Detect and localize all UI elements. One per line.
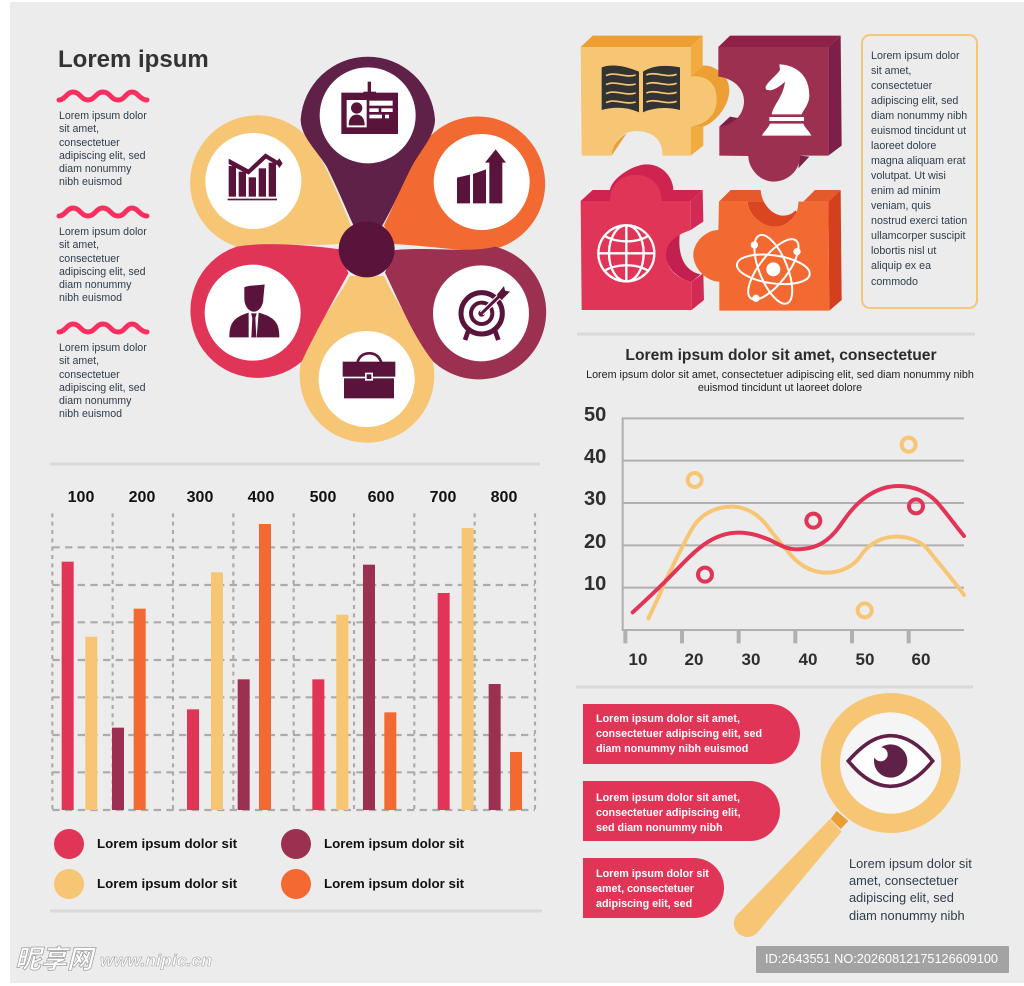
chart grid and axes (623, 417, 964, 643)
puzzle piece: yellow book (581, 36, 729, 156)
dashed grid (52, 513, 535, 810)
text panel: right of puzzle: sit amet, (871, 65, 911, 77)
magnifier caption: adipiscing elit, sed (849, 890, 954, 905)
legend: Lorem ipsum dolor sit (97, 836, 238, 851)
petal: left red (190, 244, 348, 378)
callout pills: Lorem ipsum dolor sit amet, (596, 713, 740, 725)
x axis labels: 10 (629, 650, 647, 669)
magnifier caption: Lorem ipsum dolor sit (849, 856, 972, 871)
text block 3: adipiscing elit, sed (59, 382, 146, 394)
text block 1: adipiscing elit, sed (59, 150, 146, 162)
id stamp: ID:2643551 NO:20260812175126609100 (765, 951, 998, 966)
text panel: right of puzzle: adipiscing elit, sed (871, 95, 958, 107)
callout pills: adipiscing elit, sed (596, 898, 692, 910)
puzzle graphic (581, 36, 842, 311)
column labels: 500 (310, 489, 336, 506)
x axis labels: 20 (685, 650, 703, 669)
callout pills (583, 704, 800, 918)
column labels (68, 489, 517, 506)
text panel: right of puzzle: magna aliquam erat (871, 155, 965, 167)
center circle (339, 221, 395, 277)
text block 1: nibh euismod (59, 176, 122, 188)
flower diagram (190, 57, 546, 443)
text block 3: nibh euismod (59, 408, 122, 420)
petal: bottom yellow (300, 276, 434, 443)
icon: globe (598, 225, 654, 281)
callout pills: amet, consectetuer (596, 883, 695, 895)
icon: target with arrow (461, 286, 510, 340)
magnifying glass with eye (734, 703, 951, 937)
title: Lorem ipsum (58, 46, 209, 73)
text panel: right of puzzle: consectetuer (871, 80, 933, 92)
y axis labels: 10 (584, 573, 606, 595)
callout pills: consectetuer adipiscing elit, (596, 807, 741, 819)
text block 2: sit amet, (59, 239, 99, 251)
id stamp (756, 946, 1009, 973)
x axis labels (629, 650, 930, 669)
icon: id badge (341, 82, 398, 134)
text panel: right of puzzle: nostrud exerci tation (871, 215, 967, 227)
text block 3: diam nonummy (59, 395, 132, 407)
puzzle piece: red globe (581, 164, 704, 310)
callout pills: Lorem ipsum dolor sit amet, (596, 792, 740, 804)
text panel: right of puzzle (862, 35, 977, 308)
text block 1: consectetuer (59, 137, 120, 149)
text panel: right of puzzle: volutpat. Ut wisi (871, 170, 946, 182)
wavy divider 2 (59, 208, 147, 216)
x axis labels: 30 (742, 650, 760, 669)
column labels: 600 (368, 489, 394, 506)
y axis labels: 50 (584, 404, 606, 426)
icon: chess knight (762, 64, 811, 136)
text block 2: adipiscing elit, sed (59, 266, 146, 278)
bars (62, 524, 522, 810)
text block 3: consectetuer (59, 369, 120, 381)
magnifier caption: amet, consectetuer (849, 873, 959, 888)
data lines and points (633, 438, 964, 618)
text block 2: consectetuer (59, 253, 120, 265)
text block 1: diam nonummy (59, 163, 132, 175)
text block 1: sit amet, (59, 123, 99, 135)
icon: open book (602, 66, 680, 112)
x axis labels: 40 (799, 650, 817, 669)
y axis labels: 30 (584, 488, 606, 510)
bar chart (52, 489, 535, 810)
petal: right orange (384, 116, 545, 251)
wavy divider 3 (59, 324, 147, 332)
line chart (584, 404, 964, 669)
callout pills: diam nonummy nibh euismod (596, 743, 748, 755)
x axis labels: 60 (912, 650, 930, 669)
line chart heading: Lorem ipsum dolor sit amet, consectetuer (625, 347, 937, 364)
y axis labels: 20 (584, 531, 606, 553)
text panel: right of puzzle: veniam, quis (871, 200, 931, 212)
legend: Lorem ipsum dolor sit (324, 836, 465, 851)
icon: eye (848, 736, 933, 786)
wavy divider 1 (59, 92, 147, 100)
petal: left yellow (190, 115, 351, 247)
icon: atom (735, 230, 812, 309)
text block 2: nibh euismod (59, 292, 122, 304)
puzzle piece: maroon knight (718, 36, 842, 182)
text panel: right of puzzle: aliquip ex ea (871, 260, 931, 272)
line chart description: euismod tincidunt ut laoreet dolore (698, 382, 862, 394)
callout pills: Lorem ipsum dolor sit (596, 868, 709, 880)
column labels: 800 (491, 489, 517, 506)
callout pills: sed diam nonummy nibh (596, 822, 723, 834)
petal: top purple (301, 57, 435, 227)
column labels: 200 (129, 489, 155, 506)
text panel: right of puzzle: commodo (871, 276, 918, 288)
text block 2: Lorem ipsum dolor (59, 226, 147, 238)
watermark logo: 昵享网 (15, 939, 97, 976)
legend (54, 829, 465, 899)
text panel: right of puzzle: laoreet dolore (871, 140, 936, 152)
puzzle piece: orange atom (693, 190, 842, 311)
text panel: right of puzzle: euismod tincidunt ut (871, 125, 966, 137)
text panel: right of puzzle: Lorem ipsum dolor (871, 50, 960, 62)
legend: Lorem ipsum dolor sit (97, 876, 238, 891)
column labels: 400 (248, 489, 274, 506)
x axis labels: 50 (856, 650, 874, 669)
legend: Lorem ipsum dolor sit (324, 876, 465, 891)
icon: trend chart (228, 153, 283, 200)
text block 2: diam nonummy (59, 279, 132, 291)
column labels: 100 (68, 489, 94, 506)
white icon discs (205, 67, 530, 427)
icon: growth arrow bars (457, 149, 506, 203)
watermark url: www.nipic.cn (100, 951, 212, 970)
magnifier caption: diam nonummy nibh (849, 908, 965, 923)
column labels: 700 (430, 489, 456, 506)
text block 3: Lorem ipsum dolor (59, 342, 147, 354)
icon: briefcase (343, 353, 395, 398)
text block 1: Lorem ipsum dolor (59, 110, 147, 122)
callout pills: consectetuer adipiscing elit, sed (596, 728, 762, 740)
text panel: right of puzzle: enim ad minim (871, 185, 941, 197)
text panel: right of puzzle: lobortis nisl ut (871, 245, 936, 257)
line chart description: Lorem ipsum dolor sit amet, consectetuer adipiscing elit, sed diam nonummy nibh (586, 369, 974, 381)
text panel: right of puzzle: ullamcorper suscipit (871, 230, 965, 242)
column labels: 300 (187, 489, 213, 506)
text block 3: sit amet, (59, 355, 99, 367)
petal: right maroon (385, 247, 546, 379)
icon: businessman (229, 284, 279, 337)
y axis labels: 40 (584, 446, 606, 468)
text panel: right of puzzle: diam nonummy nibh (871, 110, 967, 122)
left text list (59, 92, 147, 420)
y axis labels (584, 404, 606, 595)
